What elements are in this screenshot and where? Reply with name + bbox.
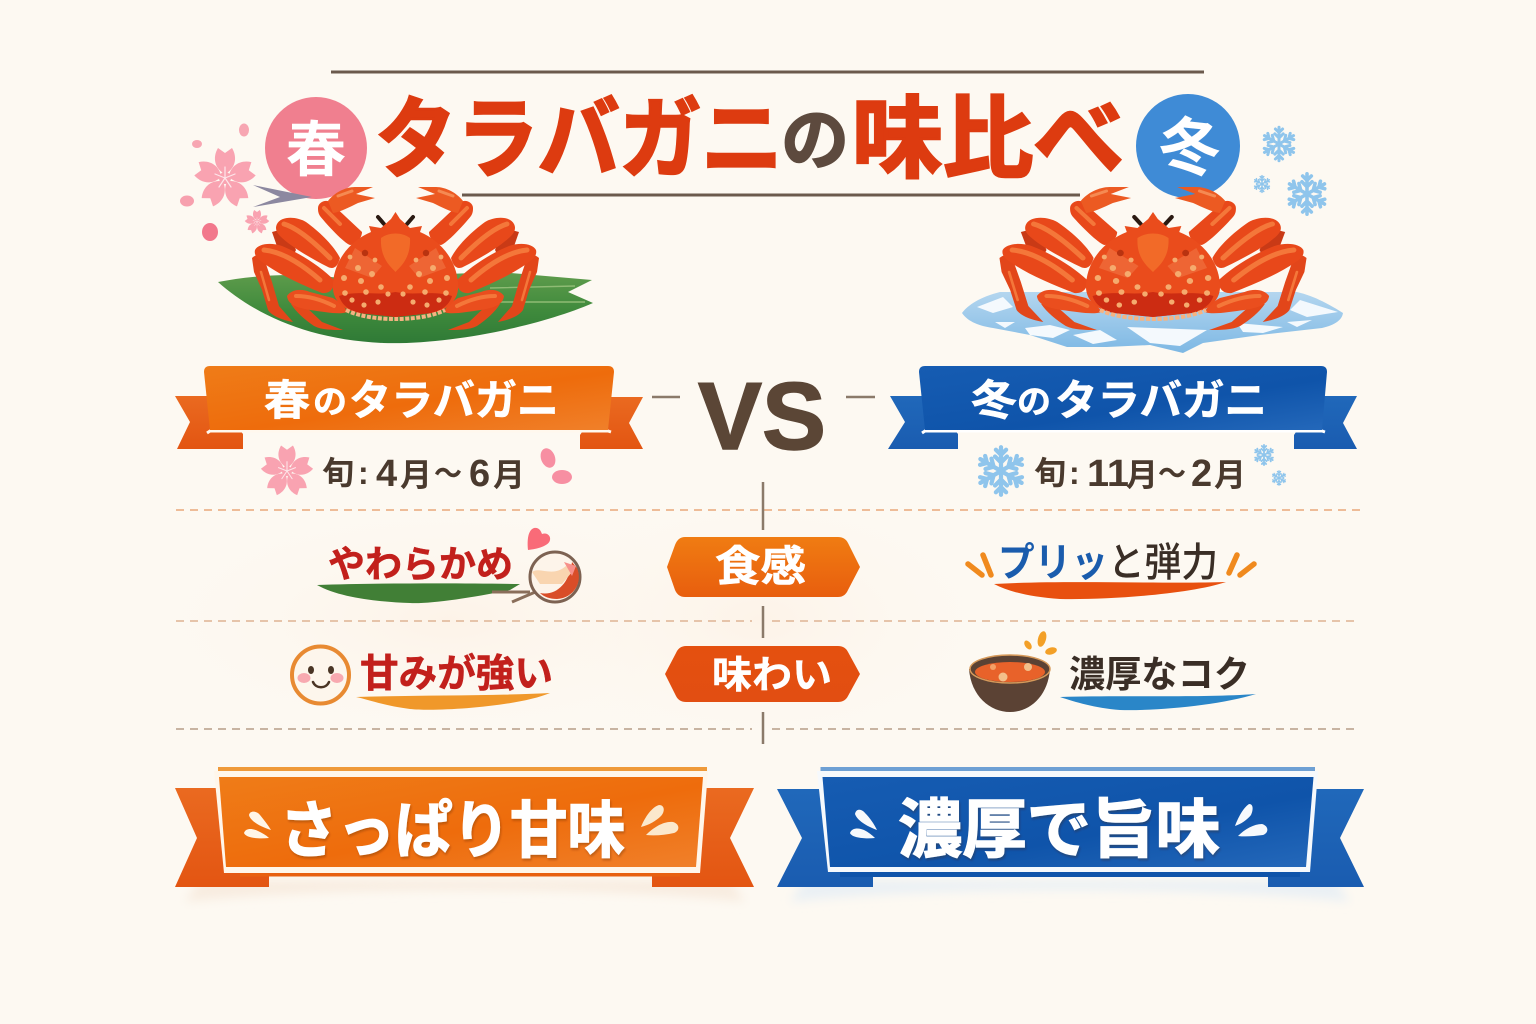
winter season period: 月: [1126, 457, 1158, 493]
spring season period: 4: [376, 453, 397, 495]
label: texture: [667, 537, 860, 597]
background glow: [110, 480, 1020, 760]
winter summary ribbon: [777, 767, 1364, 902]
spring season period: ～: [434, 458, 462, 491]
title: 味比べ: [852, 90, 1124, 190]
spring badge with cherry blossoms: 春: [286, 117, 346, 184]
label: flavor: 味わい: [712, 655, 832, 697]
spring season period: 月: [493, 457, 525, 493]
spring season period: 旬: [322, 455, 354, 491]
title: タラバガニ: [375, 90, 783, 189]
winter season period: 旬: [1034, 455, 1066, 491]
spring summary ribbon: [175, 767, 754, 902]
spring flavor: sweet: 甘みが強い: [360, 653, 553, 696]
winter texture: springy: プリッと弾力: [998, 541, 1218, 585]
title: [331, 72, 1204, 195]
winter season period: 2: [1191, 453, 1212, 495]
winter summary ribbon: 濃厚で旨味: [898, 794, 1220, 866]
ribbon: spring heading: [175, 366, 643, 449]
spring season period: [260, 446, 572, 497]
ribbon: winter heading: タラバガニ: [1055, 377, 1267, 424]
spring summary ribbon: さっぱり甘味: [280, 797, 625, 866]
ribbon: winter heading: の: [1017, 383, 1051, 420]
ribbon: winter heading: [888, 366, 1357, 449]
winter season period: 月: [1214, 457, 1246, 493]
spring flavor: sweet: [292, 646, 553, 710]
ribbon: spring heading: タラバガニ: [349, 377, 559, 424]
spring season period: 6: [469, 453, 490, 495]
winter season period: 11: [1087, 453, 1129, 495]
winter badge with snowflakes: [1136, 94, 1327, 214]
winter season period: [977, 445, 1286, 495]
VS mark: VS: [698, 363, 826, 470]
winter crab on ice: [962, 187, 1343, 353]
spring texture: soft: やわらかめ: [328, 544, 513, 585]
ribbon: spring heading: 春: [264, 377, 310, 424]
ribbon: spring heading: の: [313, 383, 347, 420]
winter flavor: rich: 濃厚なコク: [1069, 654, 1250, 695]
winter flavor: rich: [969, 630, 1256, 712]
label: flavor: [665, 646, 860, 702]
label: texture: 食感: [715, 543, 806, 590]
ribbon: winter heading: 冬: [971, 377, 1017, 424]
spring season period: 月: [400, 457, 432, 493]
winter badge with snowflakes: 冬: [1155, 111, 1224, 186]
divider lines: [176, 482, 1360, 744]
spring season period: :: [358, 455, 369, 491]
spring crab on leaf: [218, 187, 593, 343]
winter season period: :: [1069, 455, 1080, 491]
winter texture: springy: [968, 541, 1254, 599]
spring texture: soft: [317, 528, 580, 603]
winter season period: ～: [1158, 458, 1186, 491]
title: の: [781, 103, 849, 179]
spring badge with cherry blossoms: [180, 97, 367, 241]
